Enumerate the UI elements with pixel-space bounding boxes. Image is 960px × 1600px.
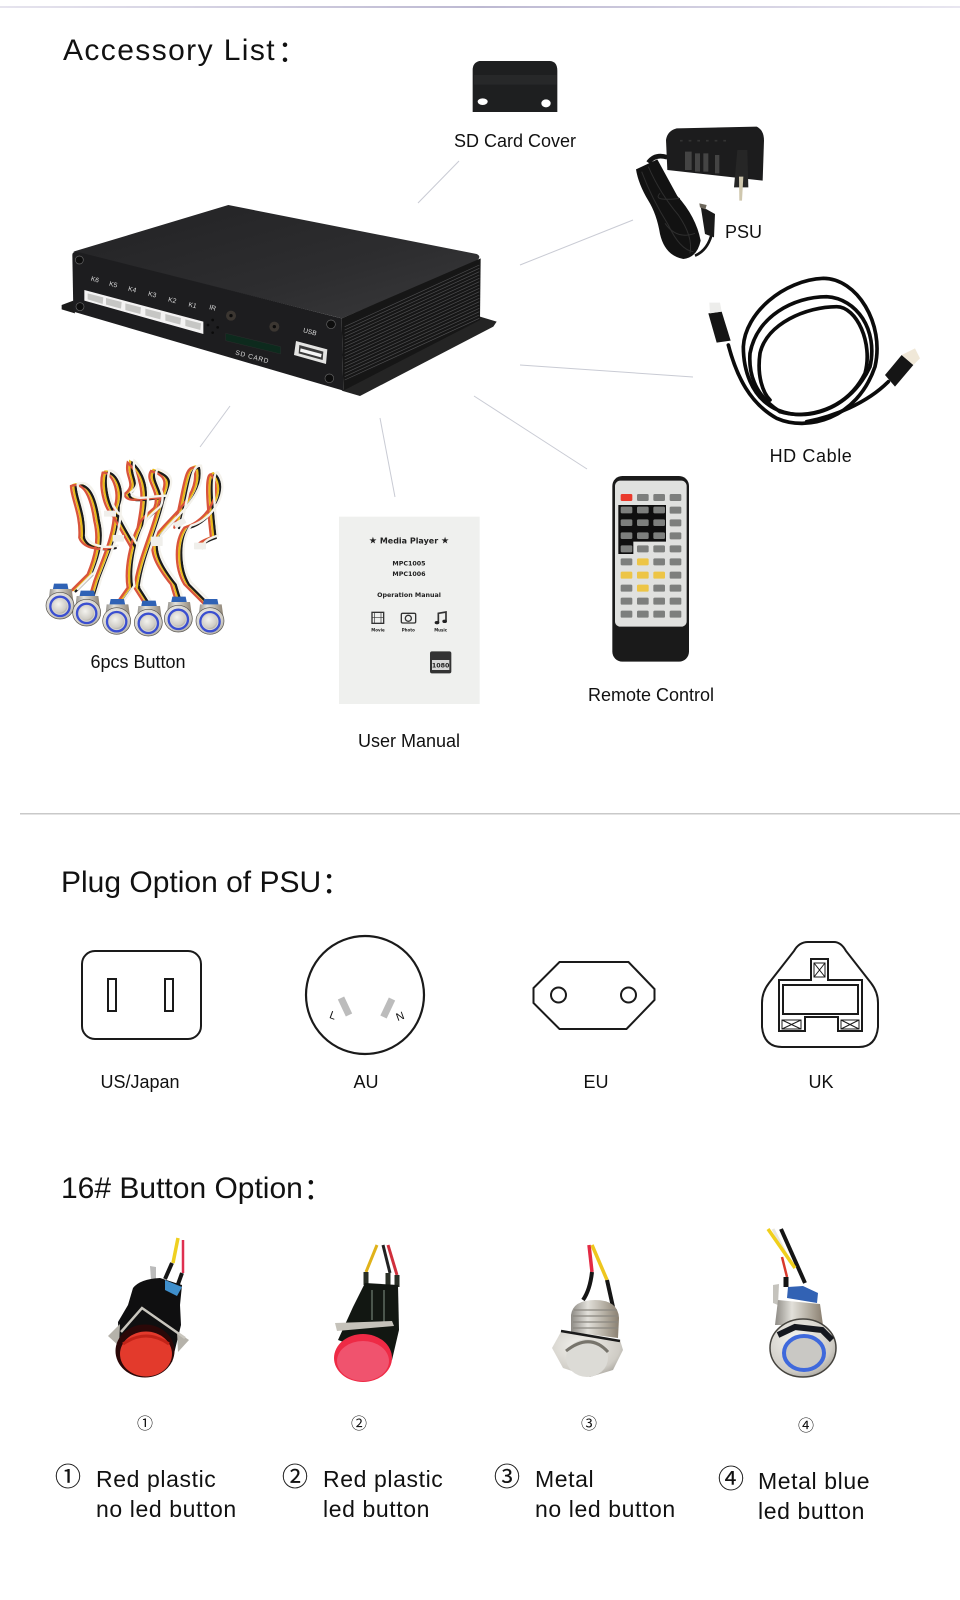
image: HD cable [708,278,920,423]
label: UK: UK [808,1072,834,1092]
heading: 16# button option: 16# Button Option [61,1172,303,1205]
SD card slot [226,333,281,354]
section divider [20,813,960,814]
label: EU: EU [583,1072,609,1092]
label: user manual: User Manual [358,731,460,751]
label: HD cable: HD Cable [770,446,852,466]
image: remote control [612,476,689,662]
option 3 text: no led button [535,1496,676,1522]
small number markers: ① [137,1415,153,1433]
port labels: K6 [90,276,100,285]
image: user manual: Photo [402,628,415,633]
label: remote control: Remote Control [588,685,714,705]
leader lines [200,161,693,497]
option 2 text [282,1462,443,1522]
image: user manual: Movie [371,628,385,633]
heading: accessory list: ： [270,38,301,70]
label: AU: AU [353,1072,379,1092]
device: media player box [62,205,497,396]
image: user manual [339,517,480,704]
option 2 text: Red plastic [323,1466,443,1492]
option 3 text: Metal [535,1466,594,1492]
small number markers: ③ [581,1415,597,1433]
top divider [0,6,960,8]
port labels: USB [302,327,318,338]
option 4 text [718,1464,870,1524]
image: user manual: MPC1006 [392,571,426,578]
option 4 text: ④ [718,1464,744,1494]
icon: US/Japan plug [82,951,201,1039]
image: user manual: ★ Media Player ★ [369,536,449,547]
small number markers: ② [351,1415,367,1433]
icon: EU plug [534,962,654,1029]
image: user manual: 1080 [432,663,450,670]
port labels: K5 [108,281,118,290]
image: red plastic no led button [108,1238,189,1378]
port labels: K3 [147,291,157,300]
button connector strip [84,290,203,334]
image: red plastic led button [334,1245,399,1382]
option 1 text [55,1462,237,1522]
option 2 text: led button [323,1496,430,1522]
image: 6pcs buttons with wires [46,461,224,636]
icon: AU plug: N [395,1010,406,1024]
option 3 text [494,1462,676,1522]
label: SD card cover: SD Card Cover [454,131,576,151]
label: 6pcs button: 6pcs Button [90,652,186,672]
port labels [90,276,318,365]
image: user manual: MPC1005 [392,561,426,568]
small number markers [137,1415,814,1435]
port labels: K4 [127,286,137,295]
option 1 text: ① [55,1462,81,1492]
label: PSU: PSU [725,222,762,242]
image: user manual: Music [434,628,448,633]
option 1 text: no led button [96,1496,237,1522]
icon: AU plug: L [328,1009,338,1023]
image: metal blue led button [768,1229,836,1377]
option 2 text: ② [282,1462,308,1492]
image: user manual: Operation Manual [377,592,441,599]
screws and holes [75,256,335,383]
panel: button options [55,1172,870,1524]
USB port [294,341,327,364]
panel: plug options [61,866,878,1092]
image: metal no led button [552,1245,623,1377]
image: PSU adapter [636,127,764,259]
port labels: K2 [167,296,177,305]
port labels: K1 [188,301,198,310]
option 1 text: Red plastic [96,1466,216,1492]
icon: AU plug [306,936,424,1054]
heading: plug option of PSU: ： [314,869,344,902]
heading: accessory list: Accessory List [63,34,276,67]
option 4 text: led button [758,1498,865,1524]
option 3 text: ③ [494,1462,520,1492]
panel: accessory list [46,34,920,751]
port labels: IR [208,304,217,313]
image: SD card cover [473,61,557,112]
heading: plug option of PSU: Plug Option of PSU [61,866,321,899]
port labels: SD CARD [234,350,270,365]
heading: 16# button option: ： [296,1175,326,1208]
label: US/Japan: US/Japan [100,1072,180,1092]
small number markers: ④ [798,1417,814,1435]
option 4 text: Metal blue [758,1468,870,1494]
icon: UK plug [762,942,878,1047]
